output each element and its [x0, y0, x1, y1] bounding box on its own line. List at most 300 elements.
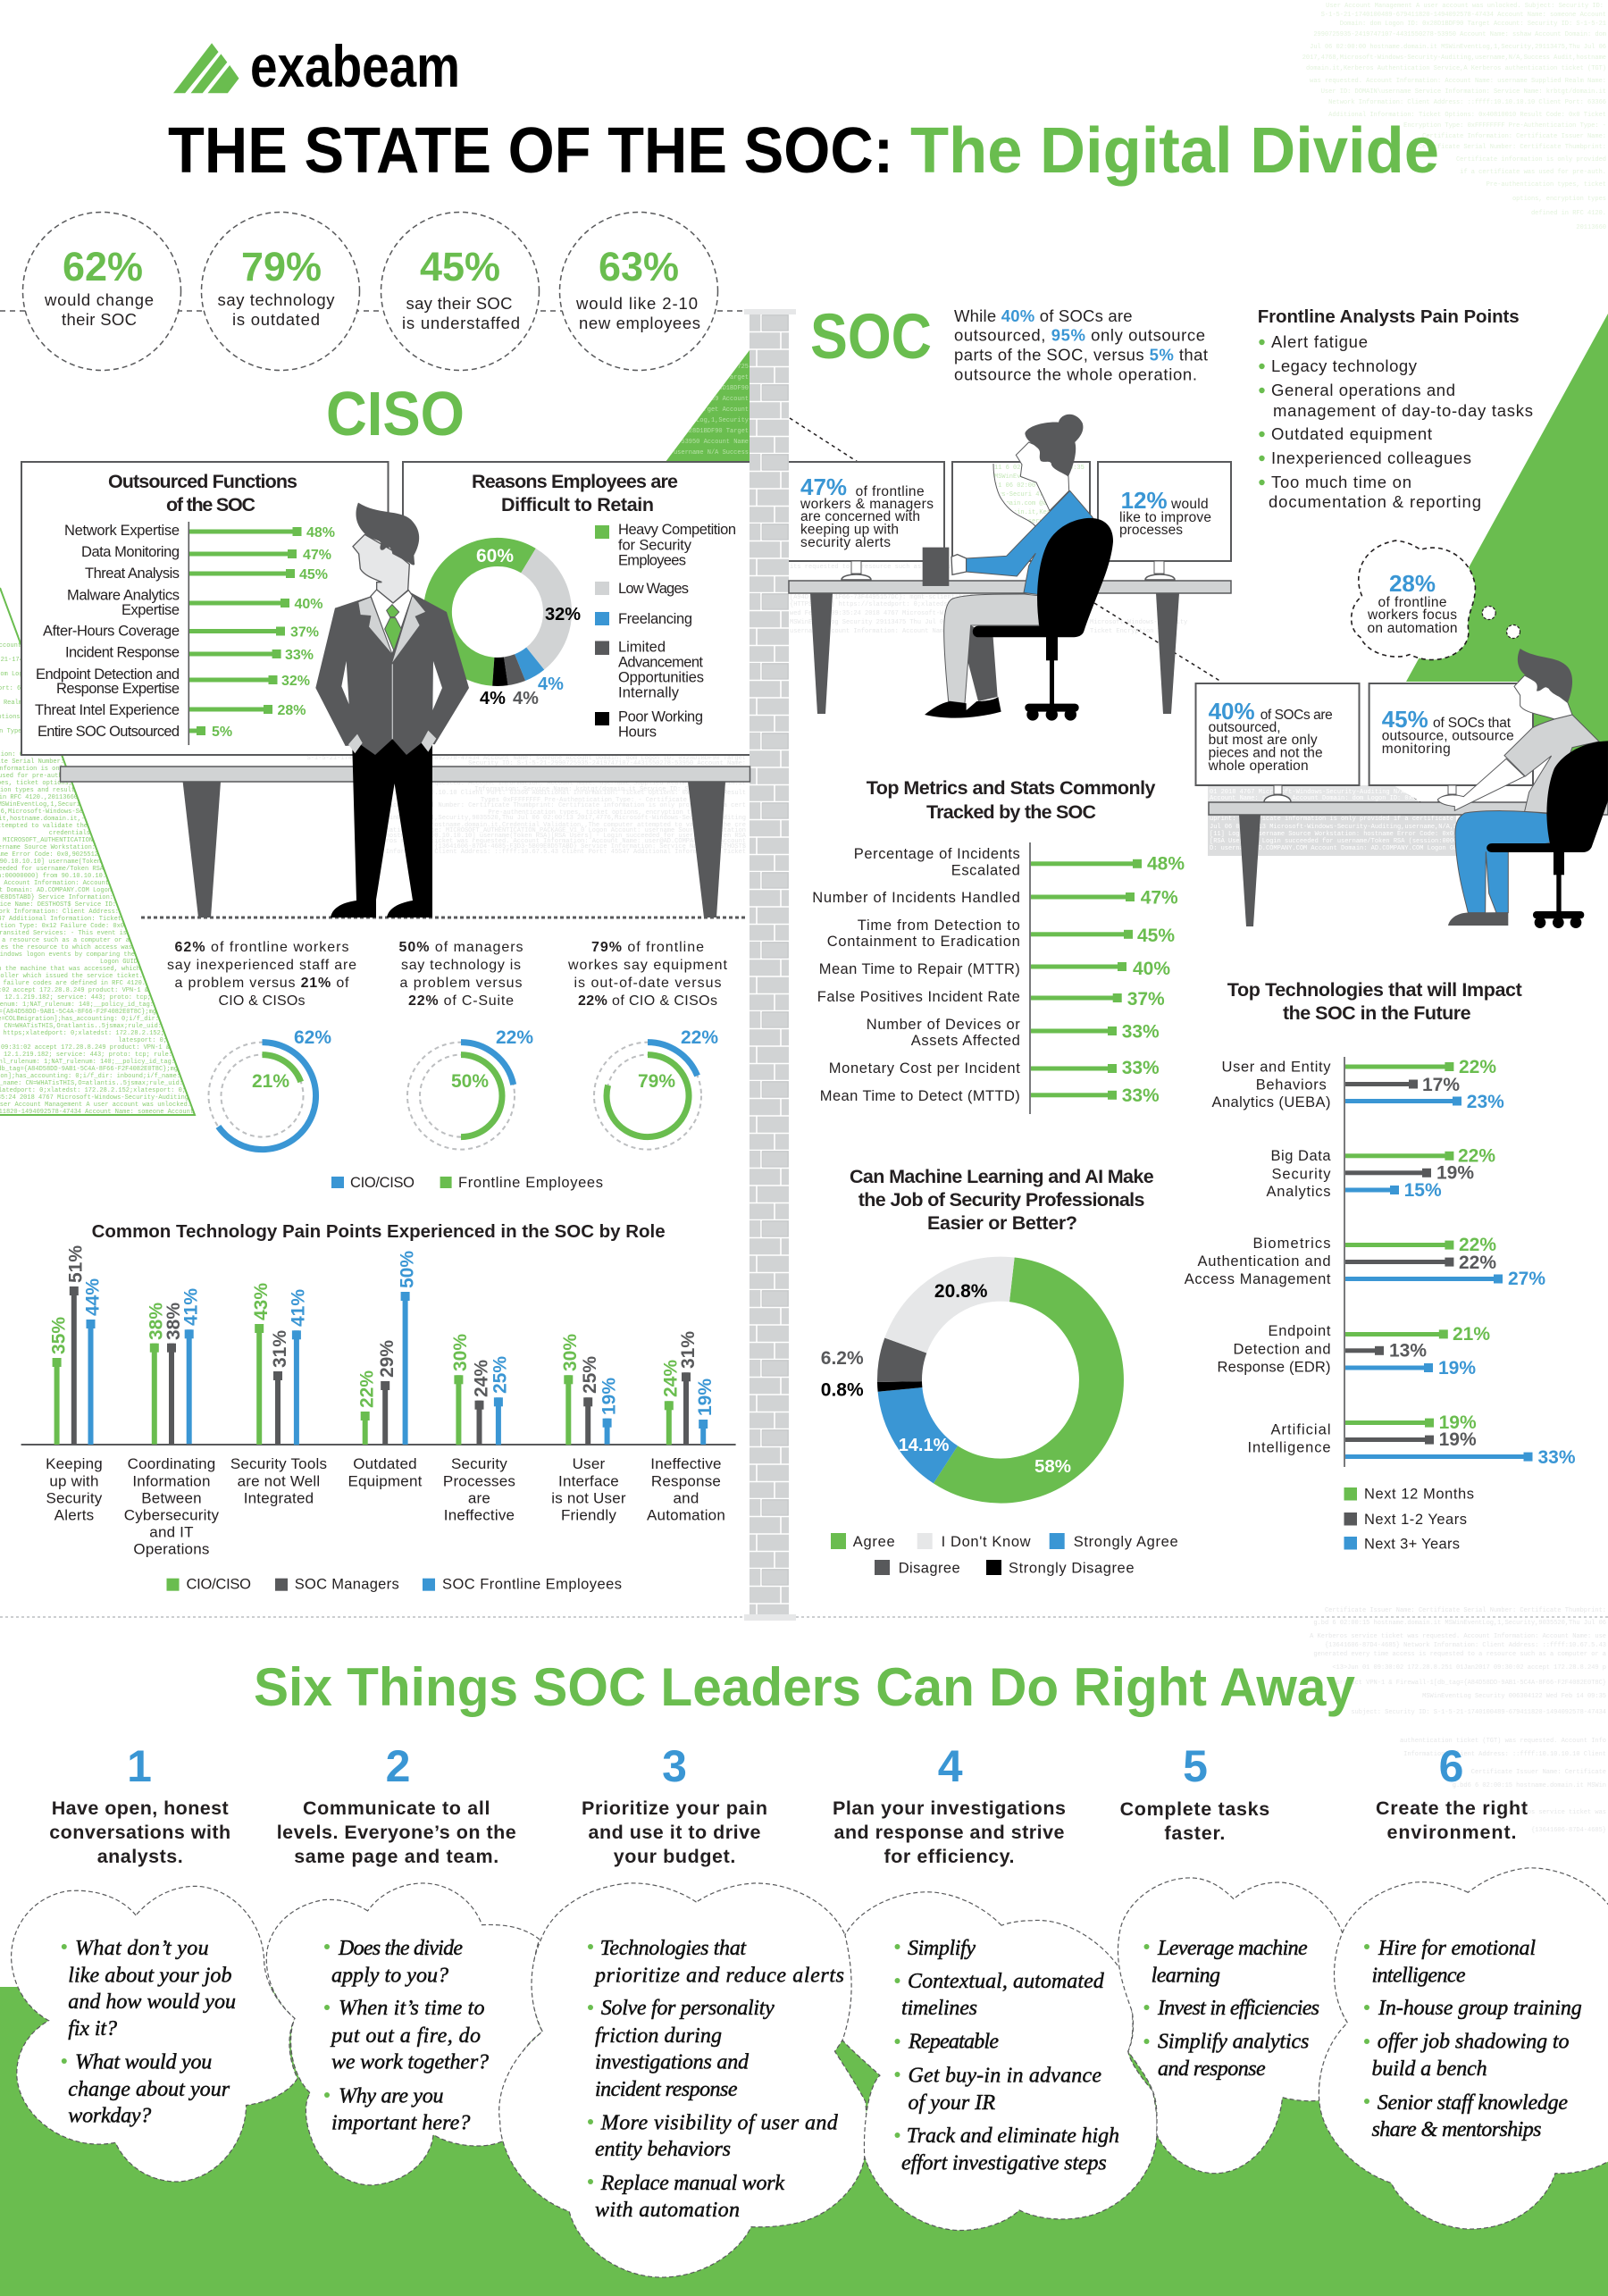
- list: frontline analysts pain points: management of day-to-day tasks: [1273, 401, 1533, 420]
- group: UEBA: User and Entity: [1222, 1060, 1331, 1076]
- cloud 1 shape: [12, 1886, 297, 2182]
- legend: Opportunities: [618, 670, 704, 686]
- legend: [331, 1175, 603, 1191]
- lapels: [358, 597, 392, 655]
- monitor: 47%: of frontline: [856, 484, 925, 499]
- dotted floor line: [141, 917, 747, 918]
- group: Ineffective Response: [647, 1331, 725, 1523]
- green triangle with log text: Jul 06 02:00:00 hostname.domain.it MSWinEventLog,1,Security: [527, 417, 749, 424]
- donut chart: 4%: [538, 675, 564, 694]
- row: Monetary Cost: 33%: [1122, 1058, 1160, 1078]
- cloud 2 text: apply to you?: [331, 1964, 448, 1987]
- cloud 1 text: fix it?: [68, 2017, 117, 2040]
- cloud 1 text: What don’t you: [75, 1937, 209, 1960]
- group: Artificial Intelligence: 19%: [1439, 1412, 1477, 1433]
- faint log text right of heading: product VPN-1 & Firewall-1[db_tag={A84D58DD-9AB1-5C4A-8F66-F2F4082E0T8C}: [1336, 1680, 1606, 1687]
- step 5: faster.: [1164, 1823, 1225, 1844]
- group: Security Tools: are not Well: [238, 1472, 320, 1489]
- shirt: [1504, 715, 1599, 813]
- group: Big Data: [1267, 1145, 1495, 1201]
- faint log text under desk: {HTTPS}(exe) https://slatedport: 0;xlatedst: 172.28.2.152; Jul 14 2018: [790, 601, 1052, 608]
- row: Malware Analytics Expertise: 40%: [295, 597, 323, 612]
- group: Keeping up with Security Alerts: up with: [49, 1472, 99, 1489]
- legend: Frontline Employees: [458, 1175, 603, 1191]
- step 3: 3: [662, 1741, 687, 1791]
- cloud 1 text: like about your job: [68, 1964, 232, 1987]
- step 4: [833, 1741, 1066, 1867]
- monitor: middle: 11 6 0236 hostname 15:35: [994, 465, 1085, 472]
- row: Endpoint Detection and Response Expertise: 32%: [281, 674, 310, 689]
- faint log block under desk: [1208, 785, 1544, 856]
- cloud 5 shape: [1118, 1878, 1347, 2174]
- cloud 4 text: Simplify: [908, 1937, 976, 1960]
- monitor: 40%: [1195, 683, 1360, 802]
- list: frontline analysts pain points: Inexperienced colleagues: [1271, 448, 1471, 467]
- cloud 1 text: workday?: [68, 2105, 151, 2128]
- monitor: middle: [952, 462, 1090, 561]
- cloud 5 text: Invest in efficiencies: [1157, 1997, 1319, 2020]
- heading: [850, 1166, 1154, 1234]
- chair: [1487, 741, 1608, 852]
- monitor: 40%: whole operation: [1208, 758, 1309, 774]
- group: Artificial Intelligence: Artificial: [1270, 1422, 1331, 1438]
- monitor: 47%: security alerts: [800, 535, 891, 550]
- faint log text under CISO desk: Security ID: S-1-5-21-2990725935-2419747107-4431550278-53950 Account Name:: [468, 760, 746, 767]
- neck and face: [1016, 442, 1069, 511]
- step 6: [1376, 1741, 1528, 1843]
- cloud 3 shape: [499, 1883, 867, 2277]
- stat text: 62% vs 21%: a problem versus 21% of: [175, 976, 349, 991]
- figure: CISO man: [315, 503, 469, 918]
- legend: Freelancing: [618, 611, 692, 627]
- stat circle: 79%: 79%: [241, 244, 322, 289]
- group: Security Processes: Processes: [443, 1472, 515, 1489]
- dotted section divider: [0, 1616, 1608, 1618]
- monitor: 12%: 12%: [1121, 487, 1168, 514]
- ring chart: 22% / 79%: 22%: [681, 1027, 718, 1048]
- stat circle: 79%: [202, 213, 359, 370]
- green triangle with log text: Jul 06 02:00:00 2017 4768 Microsoft-Windows-Security-Auditing username N/A Success: [441, 449, 749, 457]
- green triangle with log text: Account Name: username Account Domain: dom Logon ID: 0x28D1BDF90 Target: [482, 428, 749, 435]
- group: Artificial Intelligence: Intelligence: [1247, 1440, 1331, 1456]
- SOC heading: SOC: [810, 302, 932, 373]
- group: UEBA: Analytics (UEBA): [1211, 1094, 1331, 1110]
- background code text: top right: [1302, 3, 1606, 231]
- faint log text right of heading: g.bd6 6 02:00:15 hostname.domain.it MSWin: [1453, 1782, 1606, 1789]
- group: User Interface: Friendly: [561, 1506, 616, 1523]
- group: Coordinating Information: Between: [141, 1489, 202, 1506]
- tie: [387, 605, 399, 617]
- row: Endpoint Detection and Response Expertise: Endpoint Detection and: [36, 666, 180, 683]
- group: Coordinating Information: and IT: [149, 1523, 194, 1540]
- SOC intro paragraph: parts of the SOC, versus 5% that: [954, 346, 1208, 365]
- step headers: [49, 1741, 1528, 1867]
- faint log text under CISO desk: Network Information: Client Address: ::ffff:10.67.5.43 Client Port: 45547 Additional Information: Ticket: [356, 849, 746, 856]
- group: Big Data: 19%: [1436, 1163, 1474, 1183]
- group: Keeping up with Security Alerts: [46, 1245, 103, 1523]
- row: False Positives: 37%: [1127, 989, 1165, 1010]
- group: Outdated Equipment: Equipment: [348, 1472, 423, 1489]
- legend: Heavy Competition: [618, 522, 736, 538]
- faint log text under CISO desk: MSWinEventLog,1,Security,9035520,Thu Jul 06 02:00:13 2017,4776,Microsoft-Windows-Security-Auditing: [378, 815, 746, 822]
- faint log text under CISO desk: Types 0xFFFFFFFF Pre-Authentication Type: - Certificate Info: [481, 797, 706, 804]
- hair: [1518, 649, 1572, 703]
- row: Number of Incidents Handled: [812, 888, 1178, 908]
- group: Coordinating Information: [124, 1288, 220, 1557]
- group: User Interface: User: [573, 1455, 605, 1472]
- donut: 20.8%: [934, 1281, 988, 1302]
- cloud 6 text: In-house group training: [1378, 1997, 1582, 2020]
- row: Incident Response: Incident Response: [65, 645, 180, 661]
- legend: [831, 1533, 1178, 1576]
- ring chart: 22% / 79%: [594, 1027, 718, 1150]
- legend: Strongly Agree: [1074, 1534, 1178, 1550]
- group: Ineffective Response: Automation: [647, 1506, 725, 1523]
- ring chart: 22% / 79%: 79%: [638, 1071, 675, 1092]
- wordmark: exabeam: [250, 33, 460, 99]
- monitor: 47%: 47%: [800, 473, 847, 500]
- group: UEBA: 23%: [1467, 1092, 1504, 1112]
- step 3: Prioritize your pain: [582, 1797, 767, 1819]
- title: [168, 115, 1439, 187]
- monitor: 47%: [789, 462, 944, 580]
- heading: [1227, 979, 1522, 1024]
- donut: 6.2%: [821, 1348, 864, 1369]
- cloud 1 text: [62, 1937, 236, 2128]
- monitor: 40%: pieces and not the: [1209, 745, 1323, 761]
- green triangle with log text: Security ID: S-1-5-21-2990725935-2419747107-4431550278-53950 Account Name: [474, 439, 749, 446]
- list: frontline analysts pain points: Frontline Analysts Pain Points: [1258, 306, 1520, 327]
- faint log text right of heading: Certificate Issuer Name: Certificate Serial Number: Certificate Thumbprint:: [1325, 1607, 1606, 1614]
- group: User Interface: 30%: [560, 1334, 581, 1371]
- group: Coordinating Information: Information: [132, 1472, 211, 1489]
- row: Percentage of Incidents Escalated: Percentage of Incidents: [854, 846, 1020, 862]
- group: Ineffective Response: 31%: [678, 1331, 699, 1369]
- faint log text under CISO desk: A Kerberos service ticket was requested. Account Information: Account Name: user@AD.COMPANY.COM Account: [359, 838, 746, 845]
- group: Biometrics: 22%: [1459, 1253, 1496, 1273]
- faint log block under desk: Jul 06 02:00:13 Microsoft-Windows-Security-Auditing,username,N/A,Success Audit,hostname.d: [1210, 824, 1544, 831]
- row: Percentage of Incidents Escalated: 48%: [1147, 854, 1185, 874]
- group: Security Tools: 31%: [270, 1330, 290, 1368]
- list: frontline analysts pain points: Outdated equipment: [1271, 424, 1432, 443]
- faint log text right of heading: [1310, 1607, 1606, 1834]
- row: MTTR: 40%: [1133, 959, 1170, 979]
- arm gaps: [341, 661, 349, 704]
- hair: [1025, 415, 1083, 476]
- cloud 6 shape: [1319, 1868, 1608, 2229]
- group: Endpoint: 21%: [1453, 1324, 1490, 1345]
- arm: [1437, 758, 1525, 810]
- list: frontline analysts pain points: Alert fatigue: [1271, 332, 1368, 351]
- cloud 3 text: Technologies that: [600, 1937, 747, 1960]
- green triangle with log text: [666, 350, 750, 461]
- group: Security Tools: Security Tools: [230, 1455, 327, 1472]
- heading: of the SOC: [166, 494, 255, 515]
- monitor: 40%: 40%: [1209, 698, 1255, 725]
- SOC intro paragraph: [954, 306, 1208, 384]
- legend: Agree: [853, 1534, 895, 1550]
- figure: woman at desk: [923, 415, 1113, 721]
- step 1: Have open, honest: [52, 1797, 229, 1819]
- monitor: 47%: are concerned with: [800, 509, 920, 524]
- row: Network Expertise: [64, 523, 335, 540]
- icon: exabeam mark: [173, 43, 239, 93]
- cloud 6 text: offer job shadowing to: [1378, 2031, 1569, 2054]
- group: UEBA: 22%: [1459, 1057, 1496, 1077]
- row: After-Hours Coverage: [43, 624, 319, 640]
- group: User Interface: 19%: [599, 1378, 619, 1415]
- faint log text under CISO desk: {13641606-87D4-4685-F3D3-5B09E8D5TABD} Service Information: Service Name: DESTHOST$: [434, 843, 746, 851]
- list: frontline analysts pain points: Too much time on: [1271, 473, 1411, 491]
- heading: [108, 471, 297, 515]
- cloud 4 text: [895, 1937, 1119, 2175]
- heading: Common Technology Pain Points Experienced in the SOC by Role: [92, 1221, 666, 1242]
- step 4: and response and strive: [834, 1822, 1065, 1843]
- stat text: 62% vs 21%: [167, 940, 356, 1009]
- faint log text right of heading: <13>Jun 01 09:30:02 172.28.8.251 01Jan2017 09:30:02 accept 172.28.8.249 p: [1332, 1664, 1606, 1672]
- ring chart: 62% / 21%: [209, 1027, 331, 1150]
- cloud 4 text: Contextual, automated: [908, 1970, 1105, 1993]
- faint log text under desk: [790, 564, 1187, 635]
- group: Outdated Equipment: 22%: [357, 1370, 377, 1408]
- legend: Next 1-2 Years: [1364, 1512, 1467, 1528]
- stat circle: 45%: say their SOC: [406, 294, 513, 313]
- donut: 0.8%: [821, 1380, 864, 1401]
- group: Biometrics: 27%: [1508, 1269, 1545, 1289]
- row: False Positives: [817, 989, 1165, 1010]
- legend: Limited: [618, 640, 666, 656]
- legend: [166, 1577, 622, 1593]
- cloud 3 text: investigations and: [595, 2051, 750, 2074]
- stat text: 50% vs 22%: 50% of managers: [398, 940, 523, 955]
- cloud 2 text: put out a fire, do: [330, 2024, 481, 2048]
- group: Keeping up with Security Alerts: 35%: [48, 1317, 69, 1354]
- clouds: [12, 1868, 1608, 2277]
- thought bubble: 28%: on automation: [1367, 621, 1458, 636]
- group: UEBA: Behaviors: [1256, 1077, 1327, 1094]
- legend: Low Wages: [618, 581, 689, 597]
- face: [353, 534, 409, 603]
- monitor scene: SOC woman: [789, 415, 1231, 721]
- left log text slab: latesport: 0;: [118, 1037, 167, 1044]
- monitor: middle: MSWinEvent 3170,: [994, 473, 1054, 481]
- group: Keeping up with Security Alerts: Security: [46, 1489, 103, 1506]
- group: Ineffective Response: Ineffective: [650, 1455, 722, 1472]
- stat circle: 45%: is understaffed: [402, 314, 520, 332]
- row: Malware Analytics Expertise: [67, 588, 323, 618]
- stat circle: 79%: is outdated: [232, 310, 320, 329]
- dashed connector behind stat circles: [0, 310, 745, 312]
- list: frontline analysts pain points: Legacy technology: [1271, 356, 1418, 375]
- step 2: levels. Everyone’s on the: [277, 1822, 516, 1843]
- heading: Difficult to Retain: [501, 494, 654, 515]
- group: Outdated Equipment: 50%: [397, 1251, 417, 1288]
- row: Time from Detection: 45%: [1137, 926, 1175, 946]
- stat text: 79% vs 22%: 22% of CIO & CISOs: [578, 993, 717, 1009]
- list: frontline analysts pain points: documentation & reporting: [1269, 492, 1481, 511]
- donut chart: 32%: [545, 605, 581, 624]
- group: Outdated Equipment: [348, 1251, 423, 1489]
- left log text slab: Logon GUID: [100, 959, 138, 966]
- cloud 3 text: More visibility of user and: [600, 2112, 839, 2135]
- trousers: [1455, 811, 1550, 913]
- background code text: top right: Jul 06 02:00:00 hostname.domain.it MSWinEventLog,1,Security,29113475,Thu Jul 06: [1310, 44, 1606, 51]
- background code text: top right: 2990725935-2419747107-4431550278-53950 Account Name: sshaw Account Domain: dom: [1313, 31, 1606, 38]
- group: Endpoint: Response (EDR): [1217, 1360, 1331, 1376]
- cloud 5 text: learning: [1152, 1964, 1220, 1987]
- shirt: [371, 590, 413, 655]
- group: Endpoint: Detection and: [1233, 1342, 1331, 1358]
- group: Keeping up with Security Alerts: Keeping: [46, 1455, 103, 1472]
- group: Artificial Intelligence: [1247, 1412, 1576, 1468]
- stat circle: 62%: would change: [44, 290, 154, 309]
- faint log text under desk: its requested to a resource such as a computer: [790, 564, 962, 571]
- stat text: 50% vs 22%: 22% of C-Suite: [408, 993, 514, 1009]
- heading: Easier or Better?: [927, 1212, 1077, 1234]
- step 1: [49, 1741, 230, 1867]
- CISO heading: CISO: [326, 379, 465, 448]
- cloud 6 text: Senior staff knowledge: [1378, 2091, 1568, 2115]
- background code text: top right: if a certificate was used for pre-auth.: [1460, 169, 1606, 176]
- row: Threat Intel Experience: Threat Intel Experience: [35, 702, 180, 718]
- faint log text under desk: wed Feb 14 09:35:24 2018 4767 Microsoft-Windows-Security-Auditing: [790, 610, 1034, 617]
- row: False Positives: False Positives Incident Rate: [817, 989, 1020, 1005]
- group: Coordinating Information: Operations: [133, 1540, 210, 1557]
- green triangle with log text: tr:S-1-5-21-2990725: [677, 364, 749, 371]
- row: After-Hours Coverage: After-Hours Coverage: [43, 624, 180, 640]
- donut: [821, 1279, 1101, 1481]
- cloud 3 text: Solve for personality: [601, 1997, 775, 2020]
- row: Percentage of Incidents Escalated: [854, 846, 1185, 879]
- stat text: 50% vs 22%: [398, 940, 523, 1009]
- faint log block under desk: 01 2018 4767 Microsoft-Windows-Security-Auditing N/A: [1210, 789, 1405, 796]
- step 2: same page and team.: [294, 1846, 498, 1867]
- group: User Interface: Interface: [558, 1472, 619, 1489]
- row: Network Expertise: 48%: [306, 525, 335, 540]
- faint log text under CISO desk: hostname - [90.10.10.10] username(Token RSA)[RSA Users] - Login succeeded for username/Token RSA: [386, 833, 747, 840]
- faint log text under desk: Microsoft-Windows-Security: [1090, 619, 1187, 626]
- SOC intro paragraph: outsource the whole operation.: [954, 365, 1197, 384]
- cloud 3 text: entity behaviors: [595, 2138, 731, 2161]
- cloud 4 text: Get buy-in in advance: [908, 2064, 1101, 2087]
- legend: Next 12 Months: [1364, 1487, 1474, 1503]
- group: Coordinating Information: Cybersecurity: [124, 1506, 220, 1523]
- logo: exabeam: [173, 33, 460, 99]
- group: Ineffective Response: 24%: [661, 1360, 682, 1397]
- heading: [867, 777, 1156, 823]
- desk: CISO: [61, 767, 750, 918]
- cuffs: [348, 734, 363, 753]
- faint log text right of heading: g.bd 6 02:00:15 hostname.domain.it MSWinEventLog,1,Security,9035520,Thu Jul 06: [1313, 1620, 1606, 1627]
- stat circle: 63%: would like 2-10: [575, 294, 698, 313]
- group: Security Tools: 41%: [289, 1289, 309, 1327]
- legend: [595, 522, 736, 740]
- row: Incident Response: 33%: [285, 648, 314, 663]
- group: User Interface: is not User: [551, 1489, 626, 1506]
- mug: [923, 548, 949, 586]
- row: Data Monitoring: 47%: [303, 548, 331, 563]
- step 3: your budget.: [614, 1846, 735, 1867]
- step 5: [1120, 1741, 1269, 1844]
- row: Threat Intel Experience: [35, 702, 306, 718]
- panel: outsourced functions: [21, 462, 388, 755]
- green triangle with log text: Domain: dom Logon ID: 0x28D1BDF90: [624, 385, 749, 392]
- group: Big Data: 22%: [1458, 1145, 1495, 1167]
- row: Data Monitoring: Data Monitoring: [81, 544, 180, 560]
- green triangle with log text: Account Name: sshaw Target: [651, 374, 749, 381]
- figure: man at desk: [1437, 649, 1608, 928]
- group: User Interface: 25%: [580, 1356, 600, 1394]
- stat text: 79% vs 22%: workes say equipment: [567, 958, 728, 973]
- row: MTTD: 33%: [1122, 1085, 1160, 1106]
- row: Number of Devices: Number of Devices or: [867, 1017, 1020, 1033]
- background code text: top right: options, encryption types: [1512, 196, 1606, 203]
- step 5: Complete tasks: [1120, 1798, 1269, 1820]
- row: Entire SOC Outsourced: Entire SOC Outsourced: [38, 724, 180, 740]
- monitor: 45%: outsource, outsource: [1382, 729, 1514, 744]
- faint log text under CISO desk: hostname.domain.it,Credential Validation,,The computer attempted to validate the cre: [431, 822, 746, 829]
- faint log block under desk: uprint: Certificate information is only provided if a certificate was used for pre-auth: [1210, 816, 1536, 823]
- group: Coordinating Information: 38%: [147, 1303, 167, 1340]
- monitor: 47%: keeping up with: [800, 522, 899, 538]
- group: UEBA: 17%: [1422, 1075, 1460, 1095]
- left log text slab: credentials: [49, 830, 90, 837]
- row: Time from Detection: Containment to Eradication: [827, 934, 1020, 950]
- ring chart: 22% / 50%: 50%: [451, 1071, 489, 1092]
- monitor: middle: ows-Securi 4769: [994, 491, 1051, 499]
- row: Number of Devices: 33%: [1122, 1022, 1160, 1042]
- heading: Tracked by the SOC: [926, 801, 1096, 823]
- stat text: 50% vs 22%: say technology is: [401, 958, 521, 973]
- monitor: 12%: [1098, 462, 1231, 580]
- cloud 2 text: When it’s time to: [339, 1997, 484, 2020]
- stat text: 62% vs 21%: 62% of frontline workers: [175, 940, 348, 955]
- green triangle with log text: Domain: dom Logon ID: 0x28D1BDF90 Target Account: [568, 406, 749, 414]
- heading: the Job of Security Professionals: [858, 1189, 1145, 1211]
- background code text: top right: domain.it,Kerberos Authentication Service,A Kerberos authentication ticket (TGT): [1306, 65, 1606, 72]
- thought bubble: 28%: [1352, 540, 1520, 660]
- legend: Next 3+ Years: [1364, 1537, 1460, 1553]
- group: Coordinating Information: 38%: [163, 1303, 184, 1340]
- ring chart: 22% / 50%: 22%: [496, 1027, 533, 1048]
- group: Security Processes: 25%: [490, 1356, 511, 1394]
- faint log text under CISO desk: Information: Service Name: krbtgt/domain.it Service ID: S-1-5-21: [474, 786, 715, 793]
- heading: [472, 471, 678, 515]
- step 1: analysts.: [97, 1846, 183, 1867]
- monitor: 45%: [1369, 683, 1533, 802]
- group: Endpoint: 19%: [1438, 1358, 1476, 1378]
- faint log text right of heading: authentication ticket (TGT) was requested. Account Info: [1400, 1738, 1606, 1745]
- group: User Interface: [551, 1334, 626, 1523]
- faint log text under CISO desk: requested. Account Information: Account Name: username Supplied Realm Name: domain.it: [427, 780, 746, 787]
- group: Security Processes: [443, 1334, 515, 1523]
- cloud 2 text: we work together?: [331, 2051, 489, 2074]
- cloud 6 text: intelligence: [1372, 1964, 1466, 1987]
- row: Entire SOC Outsourced: 5%: [212, 725, 232, 740]
- legend: Employees: [618, 552, 686, 568]
- panel: common technology pain points: [21, 1221, 736, 1593]
- SOC intro paragraph: outsourced, 95% only outsource: [954, 326, 1205, 345]
- stat circle: 62%: their SOC: [62, 310, 137, 329]
- cloud 1 text: change about your: [68, 2078, 230, 2101]
- background code text: top right: 2017,4768,Microsoft-Windows-Security-Auditing,username,N/A,Success Audit,hostname: [1302, 54, 1606, 62]
- faint log text right of heading: Certificate Issuer Name: Certificate: [1471, 1769, 1606, 1776]
- cloud 3 text: with automation: [595, 2199, 740, 2222]
- monitor scene: SOC man: [1195, 649, 1608, 928]
- cloud 2 text: Does the divide: [338, 1937, 463, 1960]
- group: Keeping up with Security Alerts: 44%: [82, 1278, 103, 1316]
- faint log text right of heading: subject: Security ID: S-1-5-21-1740100489-679411820-1494092578-47434: [1351, 1709, 1606, 1716]
